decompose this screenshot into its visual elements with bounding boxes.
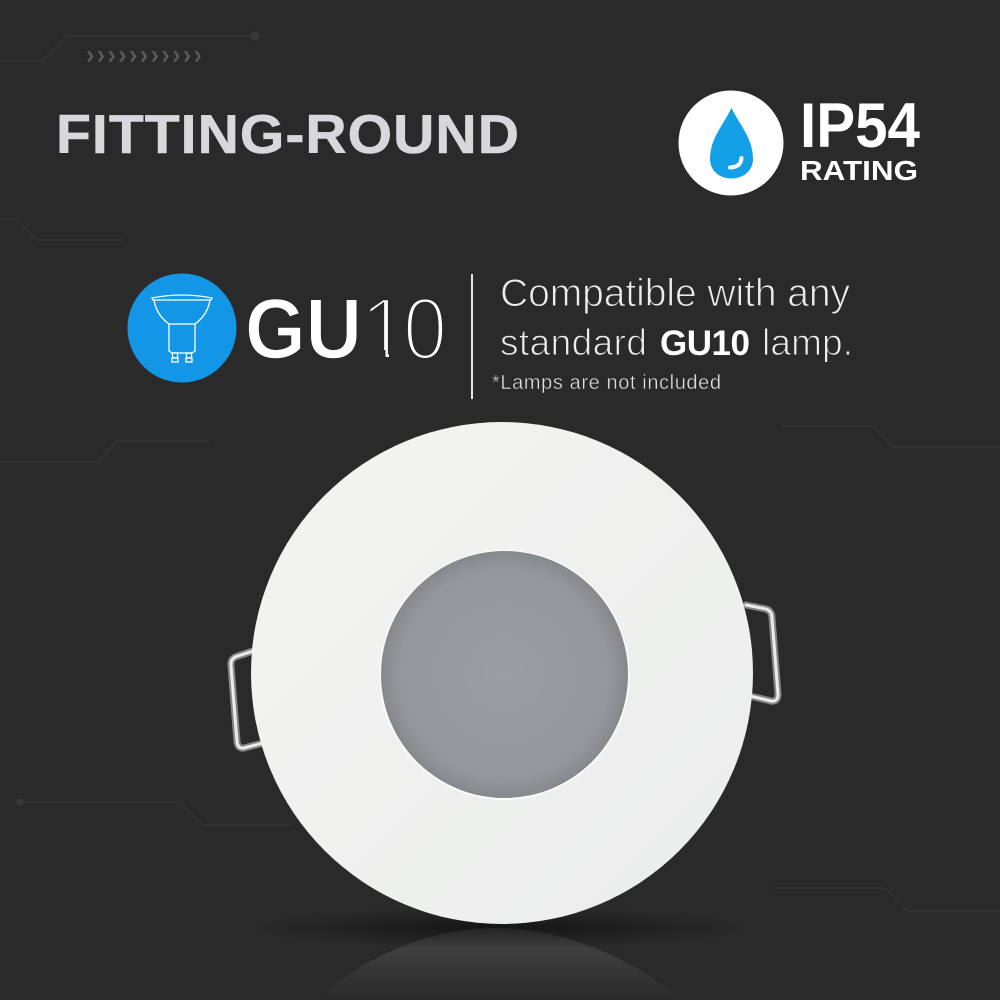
- IP54 label: IP54: [800, 91, 920, 161]
- GU10 wordmark: 0: [403, 279, 447, 378]
- RATING label: RATING: [800, 155, 918, 186]
- title: FITTING-ROUND: [56, 103, 520, 165]
- compatibility text: GU10: [660, 324, 750, 363]
- icon: water drop: [678, 90, 784, 196]
- icon: GU10 lamp: [128, 274, 236, 382]
- product shadow: [250, 908, 750, 948]
- GU10 wordmark: [245, 279, 447, 378]
- footnote: *Lamps are not included: [492, 372, 721, 394]
- decorative chevrons: ❯❯❯❯❯❯❯❯❯❯❯: [86, 51, 202, 62]
- cover for the numeral foot: [362, 350, 405, 362]
- product reflection: [317, 928, 680, 1000]
- compatibility text: standard: [500, 322, 647, 363]
- GU10 wordmark: GU: [245, 282, 362, 377]
- left spring clip: [231, 650, 263, 748]
- divider: [471, 274, 473, 399]
- compatibility text: lamp.: [762, 322, 853, 363]
- product: round fitting: [231, 422, 778, 924]
- white bezel: [251, 422, 753, 924]
- compatibility text: Compatible with any: [500, 272, 850, 315]
- frosted glass lens: [381, 551, 628, 798]
- badge: IP54 rating: [678, 90, 920, 196]
- GU10 wordmark: 1: [360, 279, 409, 378]
- inner rim: [380, 550, 630, 800]
- compatibility text: [500, 272, 853, 363]
- right spring clip: [746, 605, 778, 701]
